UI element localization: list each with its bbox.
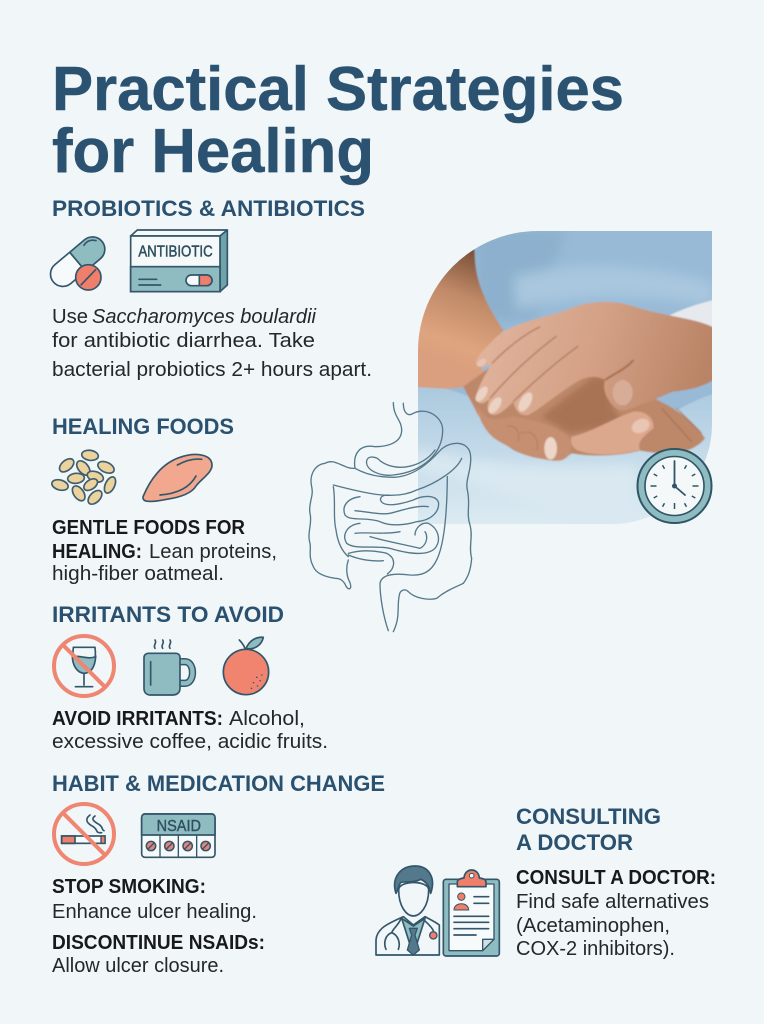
text: gentle foods: high-fiber oatmeal. (52, 562, 224, 585)
text: stop smoking: Enhance ulcer healing. (52, 900, 257, 923)
heading: consulting a doctor (516, 804, 661, 855)
text: consult a doctor: COX-2 inhibitors). (516, 937, 675, 960)
icon: lean protein (143, 454, 212, 501)
title: Practical Strategies (52, 55, 624, 124)
icon: no alcohol (54, 636, 114, 696)
section: probiotics and antibiotics (45, 196, 372, 381)
text: gentle foods: HEALING: (52, 541, 142, 563)
text: probiotic advice: Saccharomyces boulardii (92, 305, 317, 328)
section: habit and medication change (52, 771, 385, 977)
icon: NSAID blister pack (142, 814, 215, 857)
heading: probiotics and antibiotics: PROBIOTICS & ANTIBIOTICS (52, 196, 365, 221)
icon: antibiotic box (131, 230, 227, 292)
title: for Healing (52, 117, 374, 186)
icon: medical clipboard (443, 870, 499, 956)
photo: caring hands on a blanket (413, 227, 717, 530)
heading: consulting a doctor: A DOCTOR (516, 830, 633, 855)
text: discontinue NSAIDs (52, 932, 265, 977)
text: gentle foods: Lean proteins, (149, 540, 277, 563)
text: avoid irritants: Alcohol, (229, 707, 305, 730)
icon: oats (51, 449, 118, 507)
heading: irritants to avoid: IRRITANTS TO AVOID (52, 602, 284, 627)
icon: antibiotic box: ANTIBIOTIC (138, 244, 213, 261)
intestine line illustration (309, 403, 472, 632)
text: discontinue NSAIDs: DISCONTINUE NSAIDs: (52, 932, 265, 954)
icon: orange (223, 637, 269, 695)
text: stop smoking: STOP SMOKING: (52, 876, 206, 898)
icon: doctor (376, 866, 439, 955)
text: probiotic advice: for antibiotic diarrhea. Take (52, 329, 315, 352)
icon: NSAID blister pack: NSAID (157, 818, 201, 835)
section: consulting a doctor (376, 804, 716, 960)
section: healing foods (51, 414, 277, 585)
text: avoid irritants (52, 707, 328, 753)
text: avoid irritants: excessive coffee, acidic fruits. (52, 730, 328, 753)
title (52, 55, 624, 186)
text: gentle foods: GENTLE FOODS FOR (52, 517, 246, 539)
text: consult a doctor: CONSULT A DOCTOR: (516, 867, 716, 889)
section: irritants to avoid (52, 602, 328, 753)
text: consult a doctor: Find safe alternatives (516, 890, 709, 913)
text: discontinue NSAIDs: Allow ulcer closure. (52, 954, 224, 977)
heading: healing foods: HEALING FOODS (52, 414, 234, 439)
icon: clock (638, 449, 712, 523)
heading: consulting a doctor: CONSULTING (516, 804, 661, 829)
text: probiotic advice: Use (52, 305, 88, 328)
icon: capsule with no symbol (45, 232, 110, 291)
text: probiotic advice (52, 305, 372, 381)
icon: coffee mug (144, 640, 192, 695)
text: gentle foods (52, 517, 277, 585)
icon: no smoking (54, 804, 114, 864)
text: avoid irritants: AVOID IRRITANTS: (52, 708, 223, 730)
heading: habit and medication change: HABIT & MEDICATION CHANGE (52, 771, 385, 796)
text: probiotic advice: bacterial probiotics 2+ hours apart. (52, 358, 372, 381)
text: consult a doctor (516, 867, 716, 960)
text: consult a doctor: (Acetaminophen, (516, 914, 670, 937)
text: stop smoking (52, 876, 257, 923)
